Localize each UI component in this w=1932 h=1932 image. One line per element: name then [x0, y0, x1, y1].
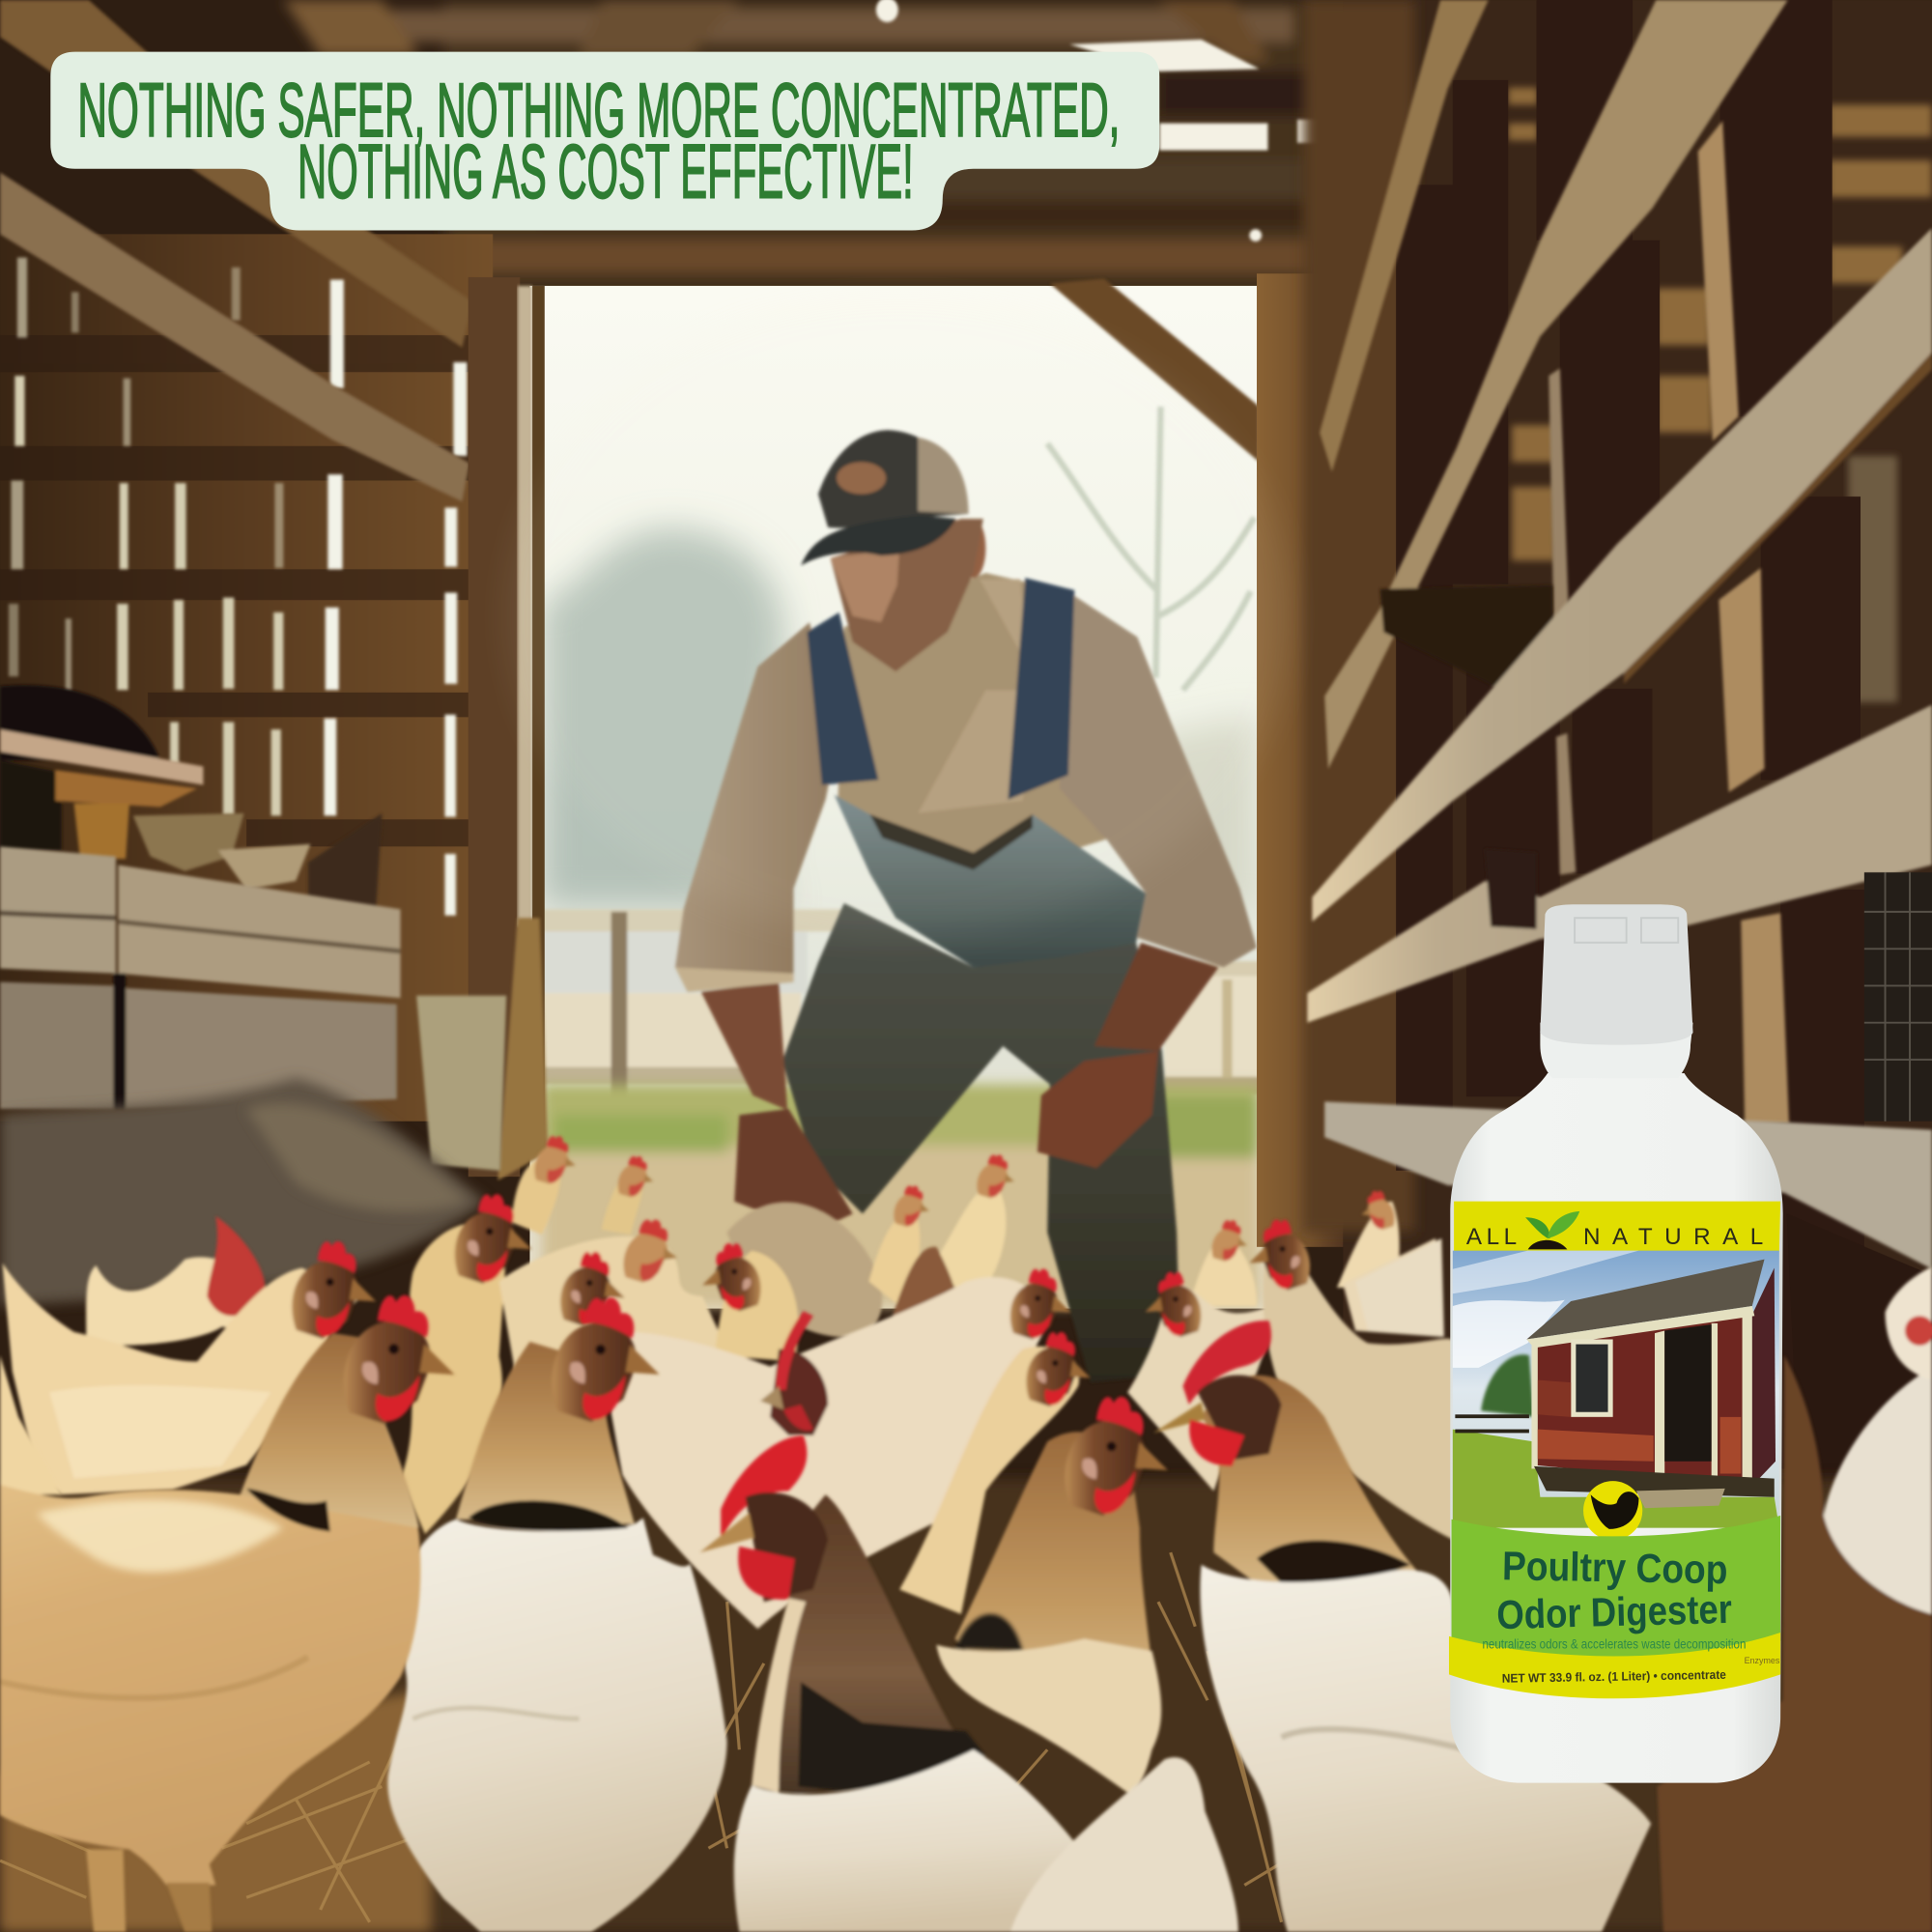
- bottle cap: [1540, 904, 1693, 1045]
- face: [831, 519, 983, 671]
- bib neckline shadow: [870, 814, 1033, 870]
- wall light slits: [9, 258, 283, 815]
- farmer ear: [961, 519, 985, 578]
- label: product name: Odor Digester: [1496, 1586, 1733, 1637]
- farmer right sleeve: [675, 622, 838, 992]
- label: lower yellow band: [1449, 1633, 1780, 1698]
- grass and dirt: [542, 1084, 1260, 1306]
- wooden boxes: [0, 846, 401, 1109]
- headline text: NOTHING AS COST EFFECTIVE!: [298, 128, 914, 214]
- sleeve cuff highlights: [675, 967, 793, 992]
- ceiling light gaps: [876, 0, 1343, 242]
- headline text: [77, 67, 1120, 214]
- hen behind tall: [401, 1223, 505, 1534]
- farmer left sleeve: [1060, 593, 1257, 967]
- trousers: [782, 903, 1180, 1382]
- product bottle: [1449, 904, 1783, 1783]
- farmer right forearm and hand: [701, 982, 787, 1110]
- label: tagline: neutralizes odors & accelerates waste decomposition: [1482, 1636, 1746, 1652]
- feed shelf and bowls: [0, 685, 382, 912]
- mid left beam: [0, 173, 469, 501]
- icon: sprout logo: [1525, 1211, 1579, 1249]
- hen: left large foreground: [0, 1295, 455, 1932]
- shirt collar and placket: [918, 579, 1041, 813]
- hen: center-left white foreground: [387, 1297, 727, 1932]
- gaps showing warm wood behind: [1508, 88, 1932, 560]
- farmer left forearm and hand: [1094, 943, 1218, 1051]
- hen: right foreground: [1153, 1321, 1651, 1932]
- shirt torso: [838, 573, 1106, 887]
- hen: far right behind bottle: [1658, 1266, 1932, 1932]
- held hen: [727, 1202, 882, 1338]
- ceiling rafters: [283, 0, 1380, 290]
- light glow from doorway: [505, 296, 1293, 936]
- bottle neck ring: [1540, 1023, 1693, 1078]
- left door post: [469, 277, 520, 1177]
- hen 2 left lying: [3, 1263, 363, 1494]
- wall planks: [0, 335, 505, 846]
- bare tree: [1047, 407, 1254, 690]
- upper left beam: [0, 0, 473, 348]
- hen tall center right: [899, 1347, 1079, 1614]
- label: yellow all natural band: ALL: [1466, 1224, 1517, 1250]
- label grass: [1453, 1430, 1779, 1528]
- label: coop photo: [1453, 1251, 1779, 1540]
- doorway: sky and landscape: [529, 286, 1269, 1309]
- left barn wall: [0, 0, 549, 1306]
- center hen bowed head: [760, 1311, 828, 1435]
- pasture fence: [542, 909, 1261, 1117]
- straw floor: [0, 1479, 1932, 1932]
- litter pile: [0, 1078, 487, 1306]
- distant trees: [542, 528, 1257, 912]
- farmer: [675, 430, 1257, 1382]
- label: enzymes mark: Enzymes: [1745, 1656, 1780, 1665]
- label: yellow all natural band: NATURAL: [1583, 1224, 1763, 1250]
- bottle body: [1450, 1073, 1783, 1783]
- label: yellow all natural band: [1454, 1202, 1780, 1252]
- right barn wall: [1303, 0, 1932, 1491]
- wire mesh: [1864, 872, 1932, 1122]
- hen: center foreground: [699, 1435, 1238, 1932]
- yellow hen badge: [1583, 1481, 1642, 1540]
- overall straps: [807, 612, 878, 784]
- headline banner: [50, 52, 1159, 231]
- label trees: [1481, 1354, 1534, 1417]
- right door post and brace: [1050, 273, 1346, 1247]
- background hens: [3, 1136, 1454, 1629]
- label: product name: [1496, 1543, 1733, 1637]
- right wall rails: [1307, 0, 1932, 1269]
- cap: [818, 430, 969, 527]
- label: green band: [1452, 1516, 1780, 1660]
- label: net weight: NET WT 33.9 fl. oz. (1 Liter) • concentrate: [1502, 1667, 1726, 1686]
- label: product name: Poultry Coop: [1502, 1543, 1728, 1592]
- dark vertical posts: [1396, 0, 1864, 1468]
- large white body hen center: [610, 1277, 1046, 1629]
- banner shape: [50, 52, 1159, 231]
- hens middle cluster: [499, 1236, 727, 1386]
- hen right behind: [1127, 1282, 1269, 1491]
- hen mid left low: [86, 1257, 259, 1346]
- coop shed: [1534, 1315, 1752, 1486]
- bucket: [416, 996, 506, 1171]
- overall bib: [835, 795, 1146, 967]
- hen: tall center right foreground: [936, 1397, 1168, 1795]
- light vertical posts: [1548, 121, 1789, 1123]
